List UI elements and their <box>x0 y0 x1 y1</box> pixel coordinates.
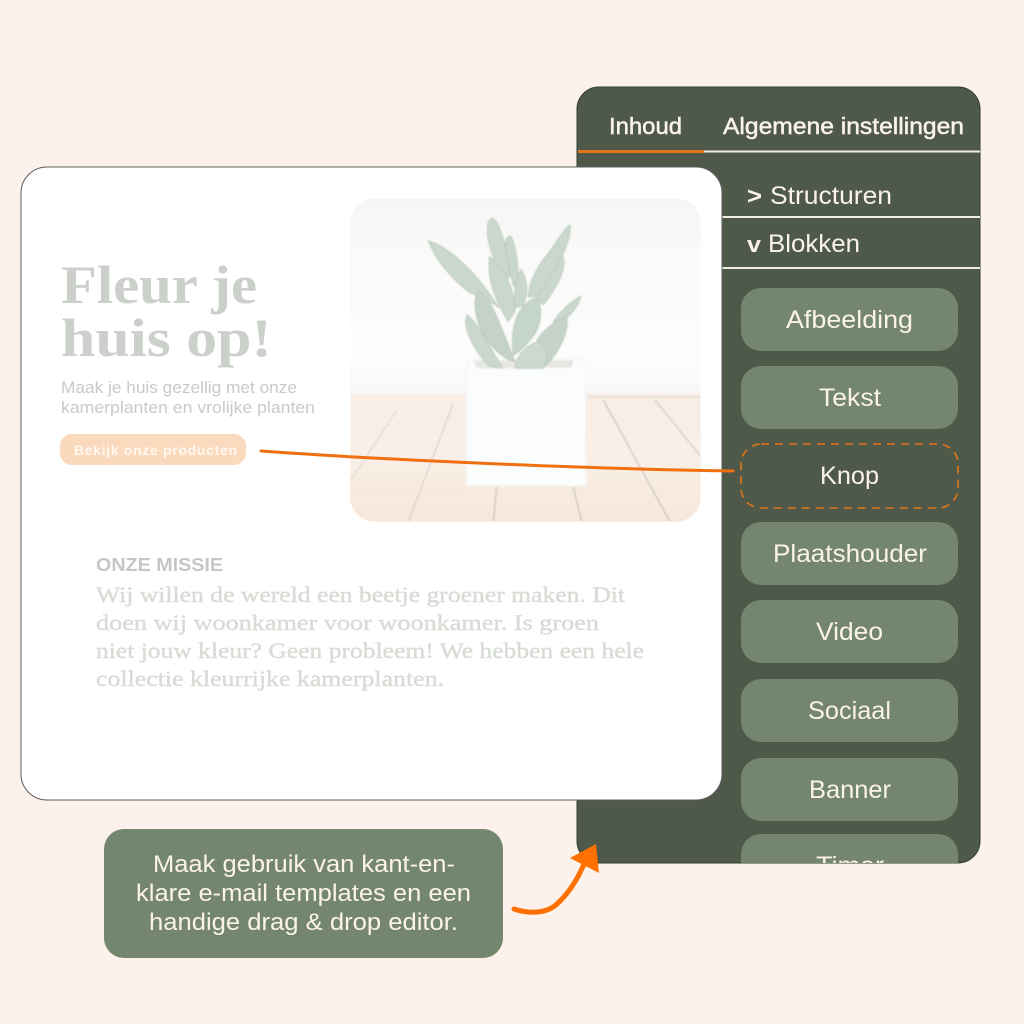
block button: Afbeelding: Afbeelding <box>786 306 913 334</box>
leaves <box>428 218 581 368</box>
arrow: callout to panel <box>514 844 599 912</box>
block button: Tekst: Tekst <box>819 384 881 412</box>
tab: Algemene instellingen: Algemene instellingen <box>723 113 964 139</box>
active tab underline <box>578 150 704 153</box>
image: plant in white pot <box>350 198 701 522</box>
mission paragraph: doen wij woonkamer voor woonkamer. Is groen <box>96 610 599 635</box>
section: Structuren: Structuren <box>770 182 892 210</box>
block button: Plaatshouder <box>741 522 958 585</box>
block button: Plaatshouder: Plaatshouder <box>773 540 927 568</box>
section: Blokken: Blokken <box>768 230 860 258</box>
block button: Tekst <box>741 366 958 429</box>
callout: klare e-mail templates en een <box>136 880 471 907</box>
mission paragraph: Wij willen de wereld een beetje groener maken. Dit <box>96 582 625 607</box>
block button: Knop (dashed, selected): Knop <box>820 462 879 490</box>
heading: Fleur je huis op!: huis op! <box>61 308 272 368</box>
call-to-action button: Bekijk onze producten <box>74 442 237 458</box>
pot <box>466 394 586 486</box>
callout: handige drag & drop editor. <box>149 909 458 936</box>
mission paragraph: niet jouw kleur? Geen probleem! We hebben een hele <box>96 638 644 663</box>
heading: Onze missie: ONZE MISSIE <box>96 555 223 575</box>
arrow: button to Knop block <box>261 451 733 471</box>
block button: Video <box>741 600 958 663</box>
intro text <box>61 379 315 417</box>
heading: Fleur je huis op!: Fleur je <box>61 255 257 315</box>
block button: Video: Video <box>816 618 883 646</box>
intro text: kamerplanten en vrolijke planten <box>61 399 315 417</box>
block button: Banner: Banner <box>809 776 891 804</box>
block button: Sociaal <box>741 679 958 742</box>
block button: Knop (dashed, selected) <box>741 444 958 508</box>
block button: Afbeelding <box>741 288 958 351</box>
section: Structuren: > <box>747 183 762 210</box>
block button: Timer (clipped) <box>741 834 958 863</box>
tab: Inhoud: Inhoud <box>609 113 682 139</box>
heading: Fleur je huis op! <box>61 255 272 368</box>
intro text: Maak je huis gezellig met onze <box>61 379 297 397</box>
callout <box>104 829 503 958</box>
block button: Timer (clipped): Timer <box>816 852 884 880</box>
callout: Maak gebruik van kant-en- <box>153 851 455 878</box>
call-to-action button <box>60 434 246 465</box>
mission paragraph <box>96 582 644 691</box>
mission paragraph: collectie kleurrijke kamerplanten. <box>96 666 444 691</box>
block button: Sociaal: Sociaal <box>808 697 891 725</box>
panel: email preview card <box>21 167 722 800</box>
panel: editor sidebar <box>577 87 980 897</box>
block button: Banner <box>741 758 958 821</box>
section: Blokken: v <box>747 232 762 257</box>
